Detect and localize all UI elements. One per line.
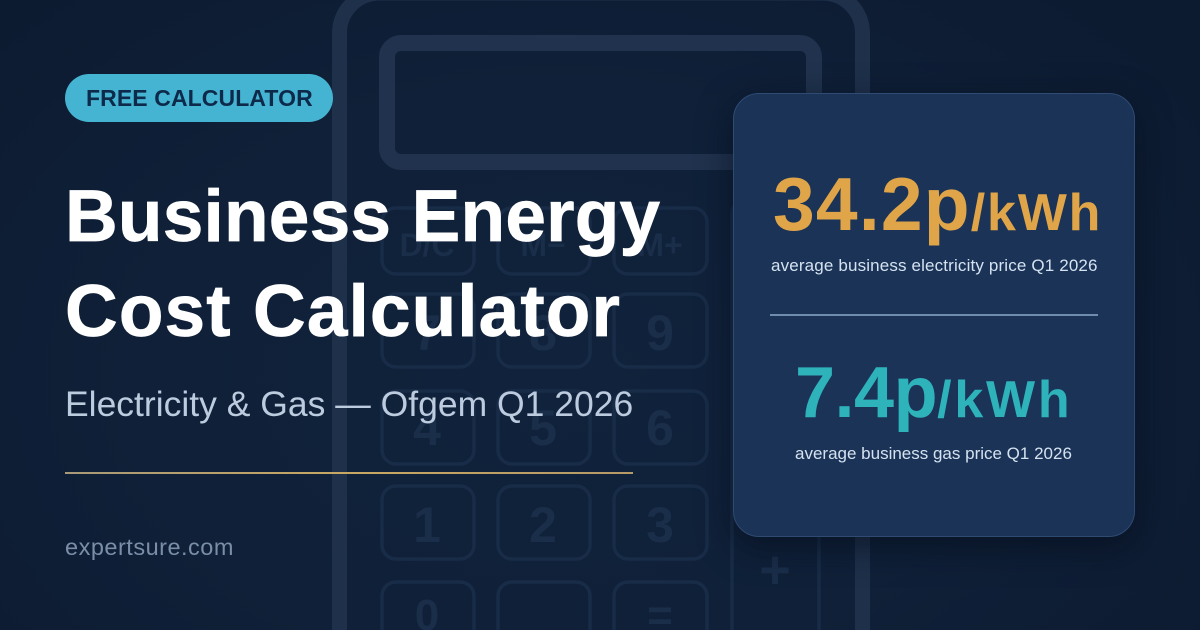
calculator key labels: 6	[646, 400, 674, 456]
calculator key labels: 9	[646, 305, 674, 361]
calculator key labels: D/C	[399, 227, 455, 263]
calculator body outline	[340, 0, 862, 630]
title: Business Energy	[65, 176, 660, 257]
separator	[770, 314, 1098, 316]
calculator key labels: 8	[529, 305, 557, 361]
calculator key labels: 2	[529, 497, 557, 553]
calculator key labels: 1	[413, 497, 441, 553]
website url: expertsure.com	[65, 534, 234, 560]
title	[65, 176, 660, 352]
calculator display	[387, 43, 814, 162]
stat: gas price: 7.4p/kWh	[795, 353, 1072, 433]
divider line	[65, 472, 633, 474]
calculator key labels: 5	[529, 400, 557, 456]
calculator key labels: M−	[520, 227, 566, 263]
subtitle: Electricity & Gas — Ofgem Q1 2026	[65, 384, 633, 424]
calculator key labels: M+	[637, 227, 683, 263]
badge: free calculator	[65, 74, 333, 122]
calculator key labels: 7	[413, 305, 441, 361]
calculator key labels: 3	[646, 497, 674, 553]
calculator keys	[382, 200, 819, 630]
calculator key labels: +	[759, 540, 791, 600]
panel: price stats	[733, 93, 1135, 537]
calculator key labels	[399, 227, 791, 630]
label: gas price: average business gas price Q1 2026	[795, 444, 1072, 463]
title: Cost Calculator	[65, 271, 621, 352]
label: electricity price: average business electricity price Q1 2026	[771, 256, 1098, 275]
calculator key labels: 4	[413, 400, 441, 456]
badge: free calculator: FREE CALCULATOR	[86, 85, 313, 111]
stat: electricity price: 34.2p/kWh	[773, 162, 1102, 246]
